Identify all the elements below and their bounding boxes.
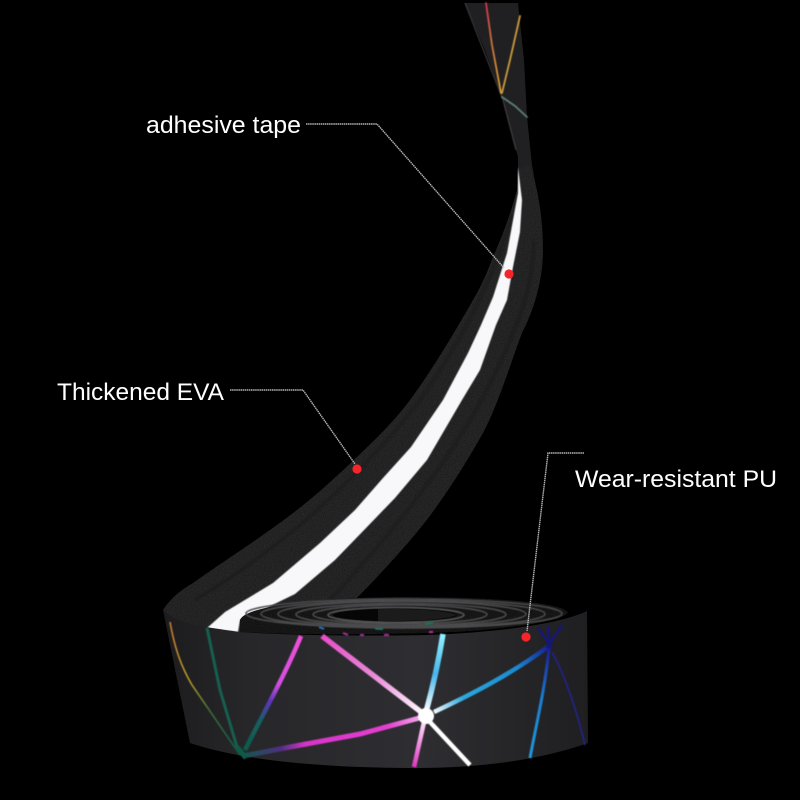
foil lines: band pattern bbox=[170, 622, 585, 767]
marker: adhesive tape bbox=[504, 269, 514, 279]
label: Wear-resistant PU bbox=[521, 453, 777, 642]
roll: top of coil bbox=[240, 597, 568, 634]
top section highlight edge bbox=[465, 3, 516, 150]
roll: small foil marks bbox=[319, 623, 433, 635]
roll: coiled layers bbox=[240, 597, 568, 635]
ribbon: unrolled tape bbox=[163, 3, 543, 634]
ribbon: EVA back bbox=[163, 165, 543, 634]
star burst centre bbox=[418, 708, 434, 724]
label: adhesive tape bbox=[146, 112, 514, 279]
roll: coil centre bbox=[333, 609, 457, 621]
leader line: Thickened EVA bbox=[230, 390, 355, 464]
ribbon: upper printed section bbox=[465, 3, 541, 335]
label text: adhesive tape: adhesive tape bbox=[146, 112, 301, 139]
roll: coil inner flap bbox=[378, 609, 457, 621]
roll: ring lines bbox=[246, 599, 562, 628]
label text: Wear-resistant PU: Wear-resistant PU bbox=[575, 466, 777, 493]
leader line: adhesive tape bbox=[306, 124, 504, 268]
foil lines: top section bbox=[486, 3, 527, 117]
ribbon: crease shade bbox=[195, 215, 512, 600]
label: Thickened EVA bbox=[57, 379, 362, 474]
ribbon: lower crease shade bbox=[330, 240, 534, 600]
marker: Wear-resistant PU bbox=[521, 632, 531, 642]
marker: Thickened EVA bbox=[352, 464, 362, 474]
leader line: Wear-resistant PU bbox=[527, 453, 584, 631]
adhesive tape: white strip bbox=[207, 167, 522, 632]
label text: Thickened EVA: Thickened EVA bbox=[57, 379, 224, 406]
roll: outer band front bbox=[163, 610, 588, 768]
